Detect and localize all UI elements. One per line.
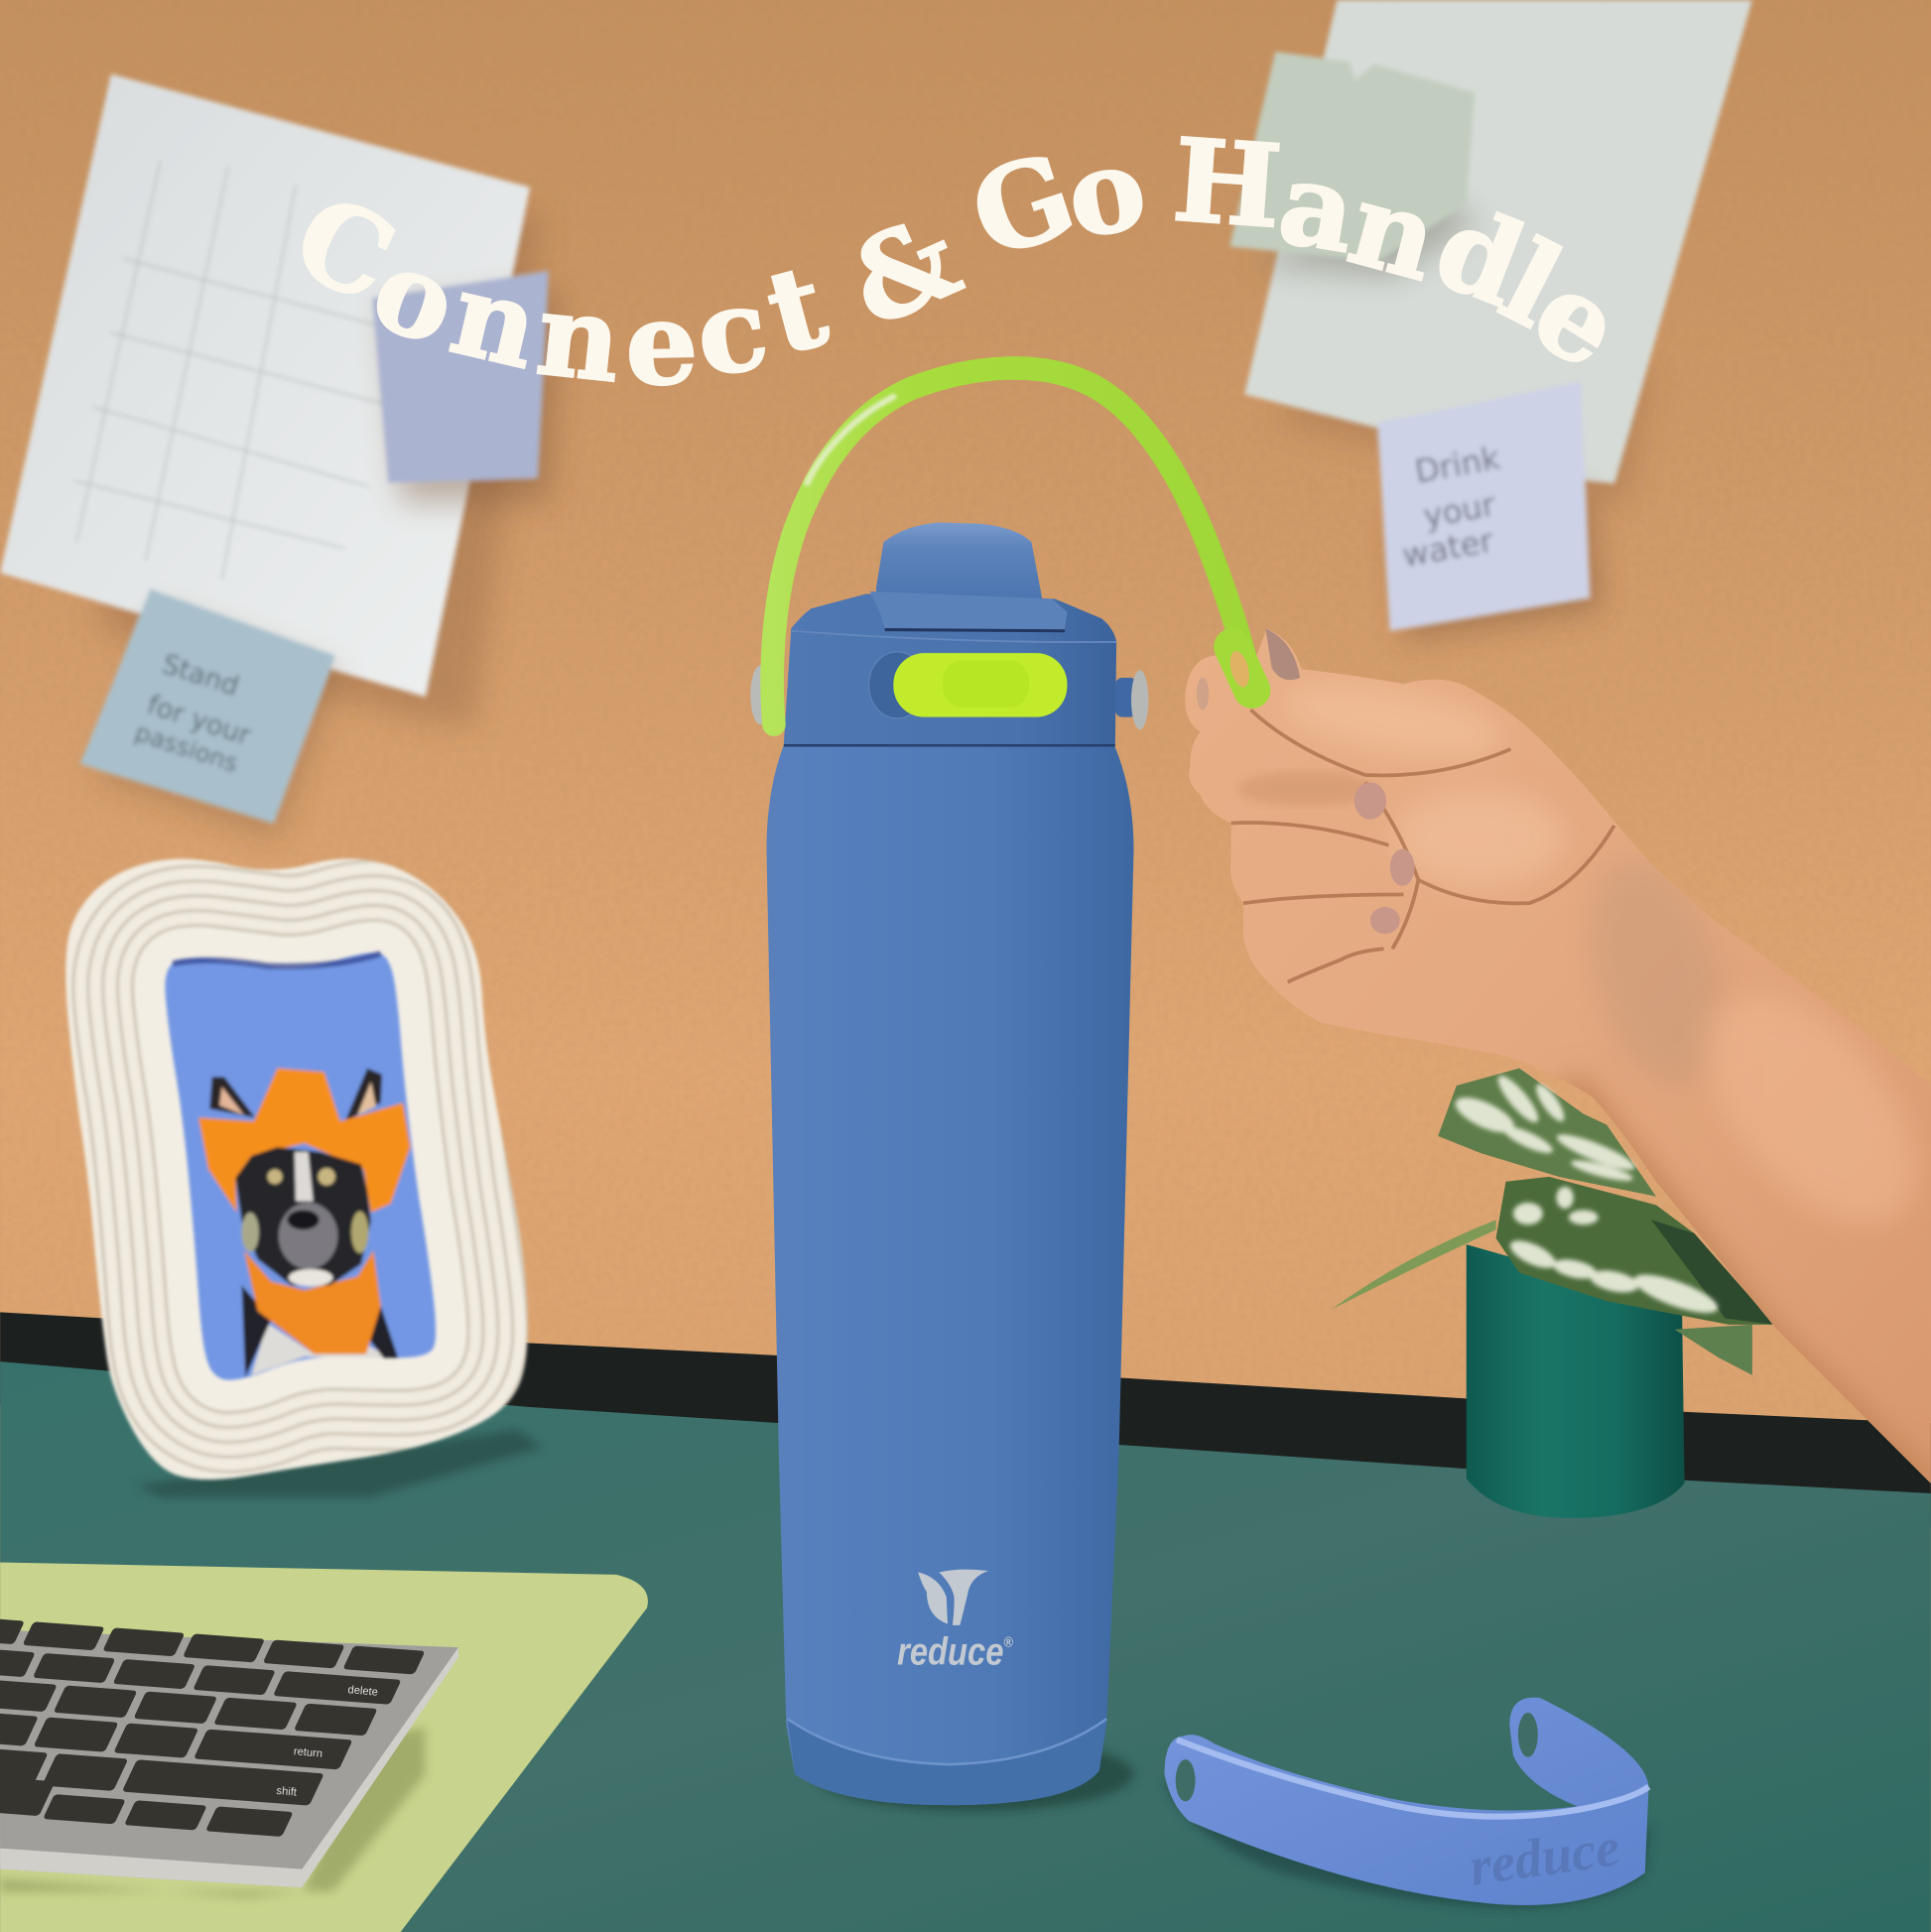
title: Connect & Go Handle: G: [957, 127, 1090, 284]
bottle logo: [897, 1570, 1013, 1674]
black desk edge strip: [0, 1312, 1931, 1528]
keyboard: [0, 1611, 458, 1897]
note: green: [1229, 52, 1479, 277]
strap logo: reduce: [1466, 1816, 1623, 1897]
sticky note: drink your water: water: [1399, 522, 1496, 575]
lid latch recess: [869, 652, 926, 718]
bottle base: [788, 1719, 1106, 1805]
desk mat: [0, 1562, 648, 1932]
title: Connect & Go Handle: C: [276, 170, 414, 327]
arm and hand: [1185, 628, 1931, 1497]
cork board wall: [0, 0, 1931, 1528]
title: Connect & Go Handle: n: [441, 246, 551, 394]
spare blue strap: [1165, 1698, 1651, 1908]
title: Connect & Go Handle: o: [1057, 120, 1155, 264]
bottle body: [766, 742, 1133, 1805]
left pin: [750, 666, 770, 724]
title: Connect & Go Handle: a: [1271, 136, 1364, 278]
lime button: [893, 653, 1067, 717]
title: Connect & Go Handle: n: [1337, 157, 1451, 307]
title: Connect & Go Handle: e: [624, 277, 699, 411]
title: Connect & Go Handle: H: [1169, 113, 1285, 253]
thumbnail: [1265, 628, 1300, 680]
finger creases: [1231, 709, 1614, 982]
title: Connect & Go Handle: n: [531, 267, 627, 408]
title: Connect & Go Handle: c: [689, 261, 775, 402]
sticky note: bottom left: for your: [143, 690, 255, 752]
desk surface: [0, 1361, 1931, 1932]
keys: [0, 1611, 426, 1841]
title: Connect & Go Handle: d: [1419, 180, 1541, 332]
bottle cap: [784, 594, 1116, 744]
pinned papers, right: [1229, 0, 1752, 641]
leaf mottling: [1451, 1071, 1722, 1321]
key labels: delete: [347, 1684, 378, 1699]
photo frame with dog: [65, 858, 542, 1497]
sticky note: drink your water: Drink: [1412, 439, 1503, 491]
sticky note: bottom left: passions: [131, 717, 242, 778]
keyboard: return: [293, 1745, 322, 1760]
frame ripple rings: [165, 953, 436, 1380]
title: Connect & Go Handle: t: [754, 238, 839, 380]
water bottle: [750, 522, 1148, 1805]
title: Connect & Go Handle: e: [1512, 244, 1643, 395]
title: Connect & Go Handle: l: [1481, 215, 1581, 353]
bottle logo: ®: [1003, 1635, 1013, 1651]
note: blue on paper: [372, 271, 561, 503]
title: Connect & Go Handle: [276, 113, 1643, 411]
bottle logo: reduce: [897, 1631, 1022, 1674]
title: Connect & Go Handle: &: [830, 190, 977, 352]
sticky note: bottom left: [80, 589, 339, 837]
title: Connect & Go Handle: o: [357, 220, 473, 371]
sticky note: drink your water: your: [1421, 485, 1498, 535]
fingernails: [1197, 678, 1415, 934]
skin shading: [1238, 673, 1931, 1497]
sticky note: bottom left: Stand: [158, 649, 242, 703]
dog photo: [165, 953, 436, 1380]
right pin: [1115, 670, 1148, 729]
keyboard: shift: [276, 1785, 298, 1799]
sticky note: drink your water: [1377, 382, 1602, 641]
pinned papers, left: [0, 74, 561, 837]
green handle: [772, 368, 1300, 724]
sketch lines on paper: [74, 160, 407, 580]
plant and green pot: [1331, 1069, 1774, 1518]
bottle shadow: [814, 1738, 1133, 1811]
